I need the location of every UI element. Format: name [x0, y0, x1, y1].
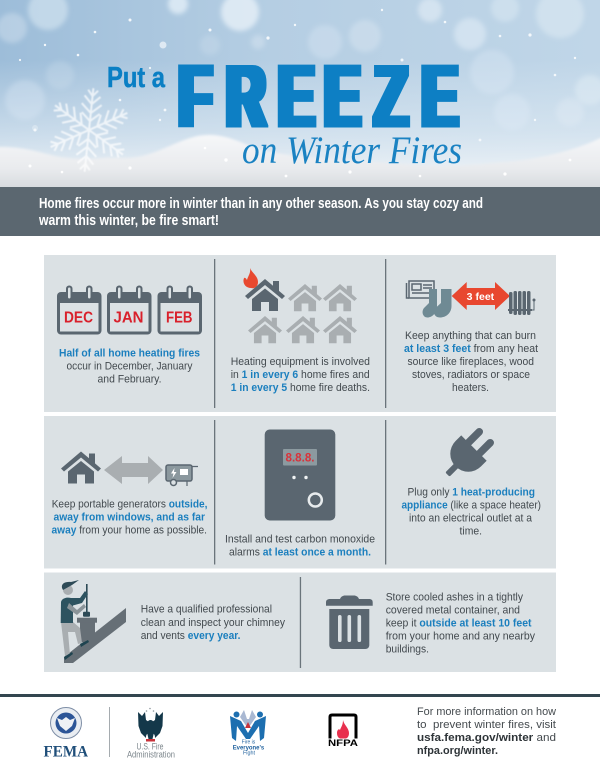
footer rule: [0, 694, 600, 697]
text: plug: time.: [460, 526, 482, 538]
text: plug: into an electrical outlet at a: [409, 512, 533, 524]
text: heating equipment: [231, 356, 370, 394]
logo: U.S. Fire Administration: U.S. Fire: [136, 742, 164, 752]
icon: CO alarm: [265, 430, 335, 520]
text: ashes: Store cooled ashes in a tightly: [386, 592, 523, 604]
text: heating equipment: Heating equipment is involved: [231, 356, 370, 368]
icon: calendars: [57, 286, 202, 334]
text: half of all fires: [59, 348, 200, 386]
icon: chimney sweep: [61, 580, 126, 663]
panel: row 2: [44, 416, 556, 568]
text: keep 3 feet: [404, 330, 539, 394]
text: keep 3 feet: stoves, radiators or space: [412, 369, 530, 381]
text: plug: Plug only 1 heat-producing: [408, 487, 535, 499]
icon: newspaper: [406, 281, 434, 298]
icon: houses: [245, 279, 357, 343]
panel: row 1: [44, 255, 556, 412]
icon: trash can: [326, 596, 373, 649]
icon: generator: [166, 465, 198, 486]
text: keep 3 feet: Keep anything that can burn: [405, 330, 536, 342]
text: heating equipment: in 1 in every 6 home fires and: [231, 369, 370, 381]
text: plug: [402, 487, 541, 538]
text: half of all fires: and February.: [98, 374, 162, 386]
icon: house: [61, 452, 101, 484]
icon: calendars: JAN: [114, 310, 144, 327]
text: CO alarms: Install and test carbon monoxide: [225, 534, 375, 546]
text: keep 3 feet: heaters.: [452, 382, 489, 394]
text: half of all fires: Half of all home heating fires: [59, 348, 200, 360]
logo: Fire is Everyone's Fight: [230, 710, 266, 756]
text: generators: [52, 499, 208, 536]
logo: Fire is Everyone's Fight: Fight: [243, 750, 255, 756]
text: ashes: keep it outside at least 10 feet: [386, 618, 532, 630]
icon: CO alarm: 8.8.8.: [286, 450, 314, 464]
icon: radiator: [508, 291, 536, 315]
panel: row 3: [44, 572, 556, 672]
arrow: 3 feet: 3 feet: [467, 291, 495, 303]
logo: U.S. Fire Administration: [127, 708, 175, 760]
text: CO alarms: [225, 534, 375, 559]
text: plug: appliance (like a space heater): [402, 500, 541, 512]
logo: FEMA: [44, 708, 88, 761]
intro banner: warm this winter, be fire smart!: [38, 213, 219, 229]
icon: calendars: FEB: [166, 310, 192, 327]
arrow: 3 feet: [452, 282, 510, 310]
icon: socks: [423, 289, 452, 318]
title: FREEZE: FREEZE: [178, 47, 458, 146]
text: ashes: from your home and any nearby: [386, 631, 535, 643]
logo: NFPA: NFPA: [328, 738, 359, 748]
text: more information: [417, 706, 556, 757]
text: more information: to prevent winter fires, visit: [417, 719, 556, 731]
text: more information: usfa.fema.gov/winter and: [417, 732, 556, 744]
hero background: winter bokeh and snow: [0, 0, 600, 190]
text: keep 3 feet: at least 3 feet from any heat: [404, 343, 539, 355]
logo: U.S. Fire Administration: Administration: [127, 750, 175, 760]
text: generators: away from your home as possible.: [52, 524, 207, 536]
title: Put a: Put a: [107, 62, 166, 94]
text: chimney: and vents every year.: [141, 630, 240, 642]
text: ashes: [386, 592, 535, 656]
text: more information: nfpa.org/winter.: [417, 745, 498, 757]
logo: Fire is Everyone's Fight: Everyone's: [233, 744, 265, 751]
text: half of all fires: occur in December, January: [66, 360, 193, 372]
title: on Winter Fires: on Winter Fires: [242, 129, 462, 172]
text: heating equipment: 1 in every 5 home fire deaths.: [231, 382, 370, 394]
text: ashes: buildings.: [386, 644, 429, 656]
text: chimney: clean and inspect your chimney: [141, 617, 285, 629]
text: keep 3 feet: source like fireplaces, wood: [408, 356, 534, 368]
text: chimney: Have a qualified professional: [141, 604, 272, 616]
logo: Fire is Everyone's Fight: Fire is: [242, 739, 255, 745]
icon: plug: [435, 422, 500, 487]
arrow: distance: [104, 456, 163, 484]
intro banner: [0, 187, 600, 236]
text: generators: Keep portable generators outside,: [52, 499, 208, 511]
icon: snowflake: [43, 84, 135, 176]
text: chimney: [141, 604, 285, 642]
logo: NFPA: [328, 715, 359, 748]
text: generators: away from windows, and as far: [54, 512, 206, 524]
icon: calendars: DEC: [64, 310, 93, 327]
title: [107, 47, 462, 172]
text: more information: For more information on how: [417, 706, 556, 718]
text: CO alarms: alarms at least once a month.: [229, 547, 371, 559]
icon: flame: [243, 268, 258, 288]
text: ashes: covered metal container, and: [386, 605, 520, 617]
intro banner: Home fires occur more in winter than in any other season. As you stay cozy and: [39, 196, 483, 212]
logo: FEMA: FEMA: [44, 744, 88, 761]
